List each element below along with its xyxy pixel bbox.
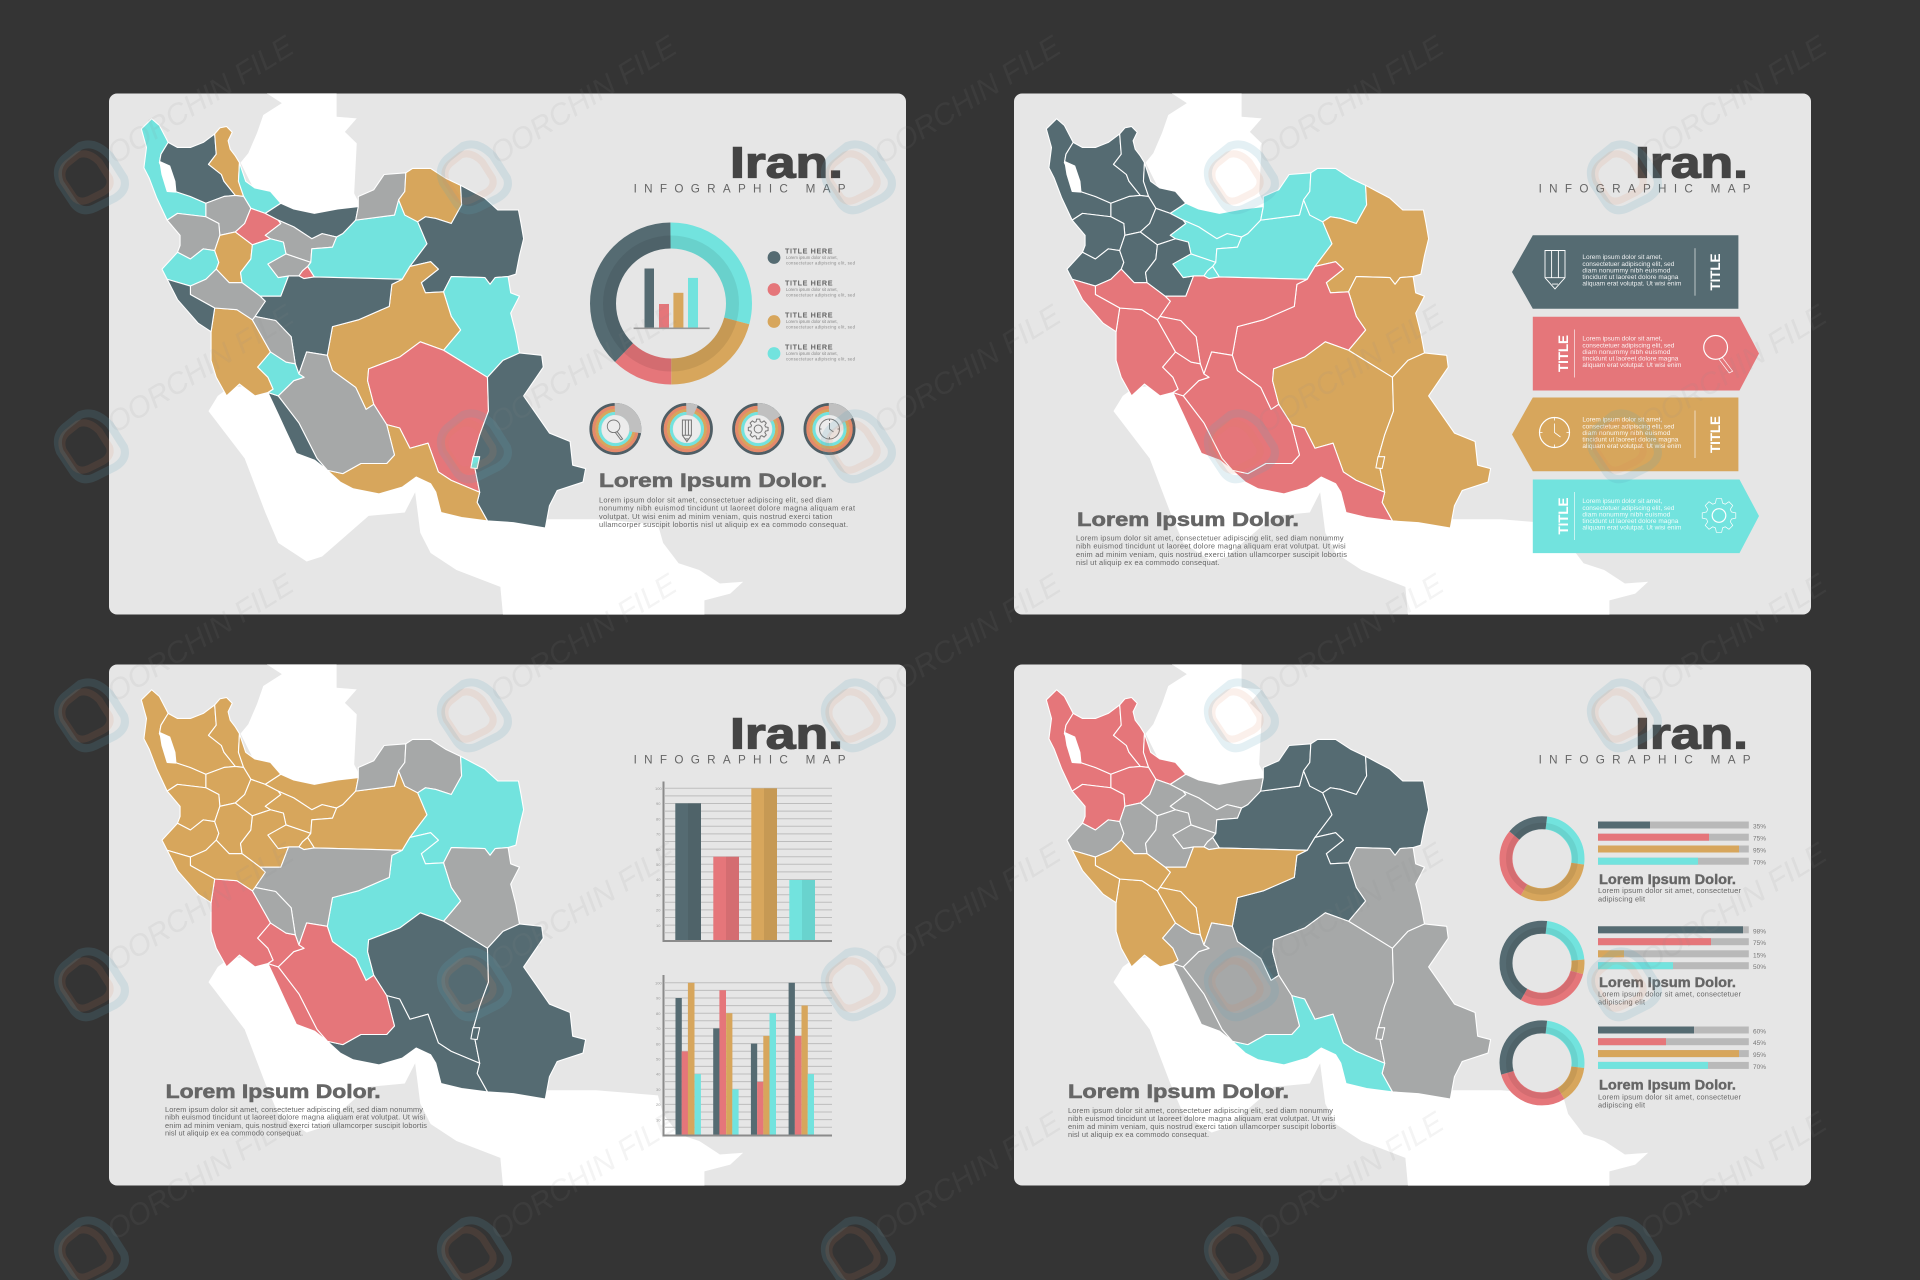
subtitle: INFOGRAPHIC MAP: [1539, 754, 1751, 766]
banner: teal gear: aliquam erat volutpat. Ut wisi enim: [1582, 525, 1681, 532]
stat block 1: Lorem Ipsum Dolor.: [1599, 872, 1736, 887]
title: Iran.: [730, 709, 843, 758]
body text: enim ad minim veniam, quis nostrud exerci tation ullamcorper suscipit lobortis: [1068, 1122, 1336, 1131]
map: provinces multicolour: [141, 119, 586, 528]
watermark layer: OORCHIN FILE: [484, 1105, 683, 1247]
bar chart: four bars: 50: [656, 862, 661, 867]
body text: nonummy nibh euismod tincidunt ut laoreet dolore magna aliquam erat: [599, 504, 855, 512]
body text: nisl ut aliquip ex ea commodo consequat.: [1068, 1130, 1209, 1139]
bar chart: grouped bars: 100: [655, 980, 662, 986]
stat block 1: 35%: [1753, 824, 1766, 830]
stat block 1: 75%: [1753, 836, 1766, 842]
bar chart: four bars: 40: [656, 877, 661, 882]
banner: red magnifier: aliquam erat volutpat. Ut wisi enim: [1582, 362, 1681, 369]
watermark layer: OORCHIN FILE: [484, 836, 683, 978]
banner: red magnifier: tincidunt ut laoreet dolore magna: [1582, 356, 1679, 362]
watermark layer: OORCHIN FILE: [1634, 298, 1833, 440]
body text: nisl ut aliquip ex ea commodo consequat.: [165, 1128, 303, 1138]
surrounding seas: [1113, 664, 1648, 1186]
stat block 2: 98%: [1753, 928, 1766, 935]
icon: magnifier ring: [591, 404, 640, 454]
bar chart: four bars: 10: [656, 923, 661, 928]
stat block 2: adipiscing elit: [1598, 998, 1645, 1006]
heading: Lorem Ipsum Dolor.: [1077, 509, 1299, 531]
map: five regions: [141, 690, 586, 1099]
watermark layer: OORCHIN FILE: [868, 567, 1067, 709]
stat block 2: [1506, 926, 1766, 1006]
bar chart: grouped bars: 70: [656, 1026, 661, 1031]
body text: Lorem ipsum dolor sit amet, consectetuer adipiscing elit, sed diam nonummy: [165, 1105, 423, 1114]
icon: pencil ring: [662, 404, 711, 454]
bar chart: four bars: 30: [656, 892, 661, 897]
watermark layer: OORCHIN FILE: [101, 1105, 300, 1247]
bar chart: four bars: 20: [656, 908, 661, 913]
stat block 2: 75%: [1753, 940, 1766, 947]
mini bar chart: [634, 268, 710, 329]
stat block 1: [1506, 822, 1766, 903]
legend: consectetuer adipiscing elit, sed: [786, 260, 856, 266]
banner: amber clock: consectetuer adipiscing elit, sed: [1582, 423, 1675, 430]
legend: TITLE HERE: [785, 278, 833, 288]
banner: teal gear: tincidunt ut laoreet dolore magna: [1582, 518, 1679, 525]
watermark layer: OORCHIN FILE: [1251, 836, 1450, 978]
body text: enim ad minim veniam, quis nostrud exerci tation ullamcorper suscipit lobortis: [1076, 550, 1347, 559]
bar chart: four bars: [655, 782, 832, 941]
icon: clock ring: [805, 404, 854, 454]
body text: enim ad minim veniam, quis nostrud exerci tation ullamcorper suscipit lobortis: [165, 1121, 427, 1130]
stat block 3: adipiscing elit: [1598, 1100, 1645, 1110]
banner: red magnifier: consectetuer adipiscing elit, sed: [1582, 342, 1675, 349]
body text: [1076, 534, 1347, 567]
watermark layer: OORCHIN FILE: [1634, 1105, 1833, 1247]
banner: teal gear: Lorem ipsum dolor sit amet,: [1582, 498, 1663, 505]
banner: dark pencil: tincidunt ut laoreet dolore magna: [1582, 274, 1679, 281]
legend: consectetuer adipiscing elit, sed: [786, 292, 856, 298]
stat block 1: Lorem ipsum dolor sit amet, consectetuer: [1598, 886, 1742, 895]
bar chart: grouped bars: 20: [656, 1102, 661, 1107]
banner: amber clock: TITLE: [1708, 416, 1723, 453]
stat block 1: 95%: [1753, 848, 1766, 854]
watermark layer: OORCHIN FILE: [1634, 836, 1833, 978]
stat block 3: Lorem ipsum dolor sit amet, consectetuer: [1598, 1092, 1742, 1102]
heading: Lorem Ipsum Dolor.: [166, 1081, 381, 1103]
banner: teal gear: [1533, 480, 1759, 553]
watermark layer: OORCHIN FILE: [868, 836, 1067, 978]
watermark layer: OORCHIN FILE: [1634, 567, 1833, 709]
stat block 3: 70%: [1753, 1064, 1766, 1071]
watermark layer: OORCHIN FILE: [101, 298, 300, 440]
banner: teal gear: TITLE: [1556, 498, 1571, 534]
banner: dark pencil: [1512, 235, 1738, 309]
bar chart: grouped bars: 30: [656, 1087, 661, 1092]
map: five regions: [1046, 690, 1491, 1099]
body text: Lorem ipsum dolor sit amet, consectetuer adipiscing elit, sed diam: [599, 496, 832, 504]
legend: consectetuer adipiscing elit, sed: [786, 356, 856, 362]
stat block 3: 95%: [1753, 1052, 1766, 1059]
body text: nisl ut aliquip ex ea commodo consequat.: [1076, 558, 1220, 567]
watermark layer: OORCHIN FILE: [484, 567, 683, 709]
legend: TITLE HERE: [785, 246, 833, 256]
banner: amber clock: tincidunt ut laoreet dolore magna: [1582, 436, 1679, 444]
bar chart: grouped bars: 50: [656, 1056, 661, 1062]
panel: bar charts and grouped map: [109, 664, 906, 1186]
body text: Lorem ipsum dolor sit amet, consectetuer adipiscing elit, sed diam nonummy: [1068, 1106, 1333, 1115]
banner: red magnifier: diam nonummy nibh euismod: [1582, 349, 1671, 356]
stat block 3: 45%: [1753, 1040, 1766, 1047]
banner: red magnifier: TITLE: [1556, 335, 1571, 372]
panel: arrow banners and grouped map: [1014, 93, 1811, 615]
banner: red magnifier: [1533, 317, 1759, 390]
donut chart: [603, 236, 739, 372]
watermark layer: OORCHIN FILE: [1634, 29, 1833, 171]
body text: volutpat. Ut wisi enim ad minim veniam, quis nostrud exerci tation: [599, 512, 832, 521]
surrounding seas: [1113, 93, 1648, 615]
stat block 3: [1506, 1026, 1766, 1110]
legend: Lorem ipsum dolor sit amet,: [786, 351, 838, 356]
watermark layer: OORCHIN FILE: [1251, 1105, 1450, 1247]
watermark layer: OORCHIN FILE: [868, 298, 1067, 440]
bar chart: grouped bars: 60: [656, 1041, 661, 1046]
banner: red magnifier: Lorem ipsum dolor sit amet,: [1582, 336, 1663, 342]
body text: Lorem ipsum dolor sit amet, consectetuer adipiscing elit, sed diam nonummy: [1076, 534, 1344, 542]
bar chart: grouped bars: 80: [656, 1011, 661, 1016]
body text: [165, 1105, 427, 1138]
watermark layer: OORCHIN FILE: [1251, 29, 1450, 171]
title: Iran.: [1635, 138, 1748, 187]
banner: dark pencil: TITLE: [1708, 254, 1723, 290]
map: four regions: [1046, 119, 1491, 528]
legend: Lorem ipsum dolor sit amet,: [786, 255, 838, 260]
legend: TITLE HERE: [785, 310, 833, 320]
bar chart: four bars: 70: [656, 832, 661, 837]
bar chart: grouped bars: [655, 975, 832, 1136]
body text: ullamcorper suscipit lobortis nisl ut aliquip ex ea commodo consequat.: [599, 520, 848, 529]
watermark layer: OORCHIN FILE: [1251, 567, 1450, 709]
title: Iran.: [1635, 709, 1748, 758]
title: Iran.: [730, 138, 843, 187]
panel: donuts with progress bars and grouped map: [1014, 664, 1811, 1186]
banner: amber clock: diam nonummy nibh euismod: [1582, 430, 1671, 437]
watermark layer: OORCHIN FILE: [868, 1105, 1067, 1247]
body text: [1068, 1106, 1336, 1139]
panel background: [109, 94, 906, 614]
watermark layer: OORCHIN FILE: [484, 298, 683, 440]
panel: donut chart and regional map: [109, 93, 906, 615]
banner: teal gear: diam nonummy nibh euismod: [1582, 512, 1671, 518]
legend: Lorem ipsum dolor sit amet,: [786, 319, 838, 324]
panel background: [1014, 664, 1811, 1186]
heading: Lorem Ipsum Dolor.: [599, 470, 827, 492]
stat block 2: 15%: [1753, 952, 1766, 959]
bar chart: four bars: 80: [656, 816, 661, 821]
stat block 1: 70%: [1753, 860, 1766, 866]
panel background: [109, 664, 906, 1186]
bar chart: grouped bars: 10: [656, 1117, 661, 1122]
banner: teal gear: consectetuer adipiscing elit, sed: [1582, 505, 1675, 512]
watermark layer: OORCHIN FILE: [101, 836, 300, 978]
watermark layer: OORCHIN FILE: [1251, 298, 1450, 440]
legend: Lorem ipsum dolor sit amet,: [786, 287, 838, 292]
subtitle: INFOGRAPHIC MAP: [1539, 182, 1751, 196]
stat block 1: adipiscing elit: [1598, 894, 1645, 903]
body text: nibh euismod tincidunt ut laoreet dolore magna aliquam erat volutpat. Ut wisi: [165, 1113, 425, 1122]
legend: TITLE HERE: [785, 342, 833, 352]
legend: consectetuer adipiscing elit, sed: [786, 324, 856, 330]
icon: gear ring: [734, 404, 783, 454]
body text: nibh euismod tincidunt ut laoreet dolore magna aliquam erat volutpat. Ut wisi: [1076, 542, 1346, 550]
banner: dark pencil: aliquam erat volutpat. Ut wisi enim: [1582, 281, 1681, 288]
bar chart: grouped bars: 90: [656, 996, 661, 1001]
watermark layer: OORCHIN FILE: [101, 29, 300, 171]
stat block 2: Lorem Ipsum Dolor.: [1599, 975, 1736, 990]
surrounding seas: [208, 664, 743, 1186]
bar chart: four bars: 90: [656, 801, 661, 806]
surrounding seas: [208, 93, 743, 615]
watermark layer: OORCHIN FILE: [868, 29, 1067, 171]
banner: amber clock: aliquam erat volutpat. Ut wisi enim: [1582, 443, 1681, 450]
banner: dark pencil: diam nonummy nibh euismod: [1582, 268, 1671, 274]
bar chart: four bars: 60: [656, 847, 661, 852]
stat block 3: 60%: [1753, 1028, 1766, 1036]
panel background: [1014, 94, 1811, 614]
body text: [599, 496, 855, 529]
stat block 2: 50%: [1753, 964, 1766, 971]
stat block 3: Lorem Ipsum Dolor.: [1599, 1078, 1736, 1092]
bar chart: grouped bars: 40: [656, 1072, 661, 1077]
banner: dark pencil: consectetuer adipiscing elit, sed: [1582, 261, 1675, 268]
subtitle: INFOGRAPHIC MAP: [634, 754, 846, 766]
heading: Lorem Ipsum Dolor.: [1068, 1081, 1289, 1103]
watermark layer: OORCHIN FILE: [101, 567, 300, 709]
legend: [768, 246, 856, 362]
stat block 2: Lorem ipsum dolor sit amet, consectetuer: [1598, 989, 1742, 998]
bar chart: four bars: 100: [655, 786, 662, 791]
banner: amber clock: [1512, 398, 1738, 471]
body text: nibh euismod tincidunt ut laoreet dolore magna aliquam erat volutpat. Ut wisi: [1068, 1114, 1335, 1123]
subtitle: INFOGRAPHIC MAP: [634, 182, 846, 196]
banner: dark pencil: Lorem ipsum dolor sit amet,: [1582, 254, 1663, 261]
watermark layer: OORCHIN FILE: [484, 29, 683, 171]
banner: amber clock: Lorem ipsum dolor sit amet,: [1582, 416, 1663, 424]
